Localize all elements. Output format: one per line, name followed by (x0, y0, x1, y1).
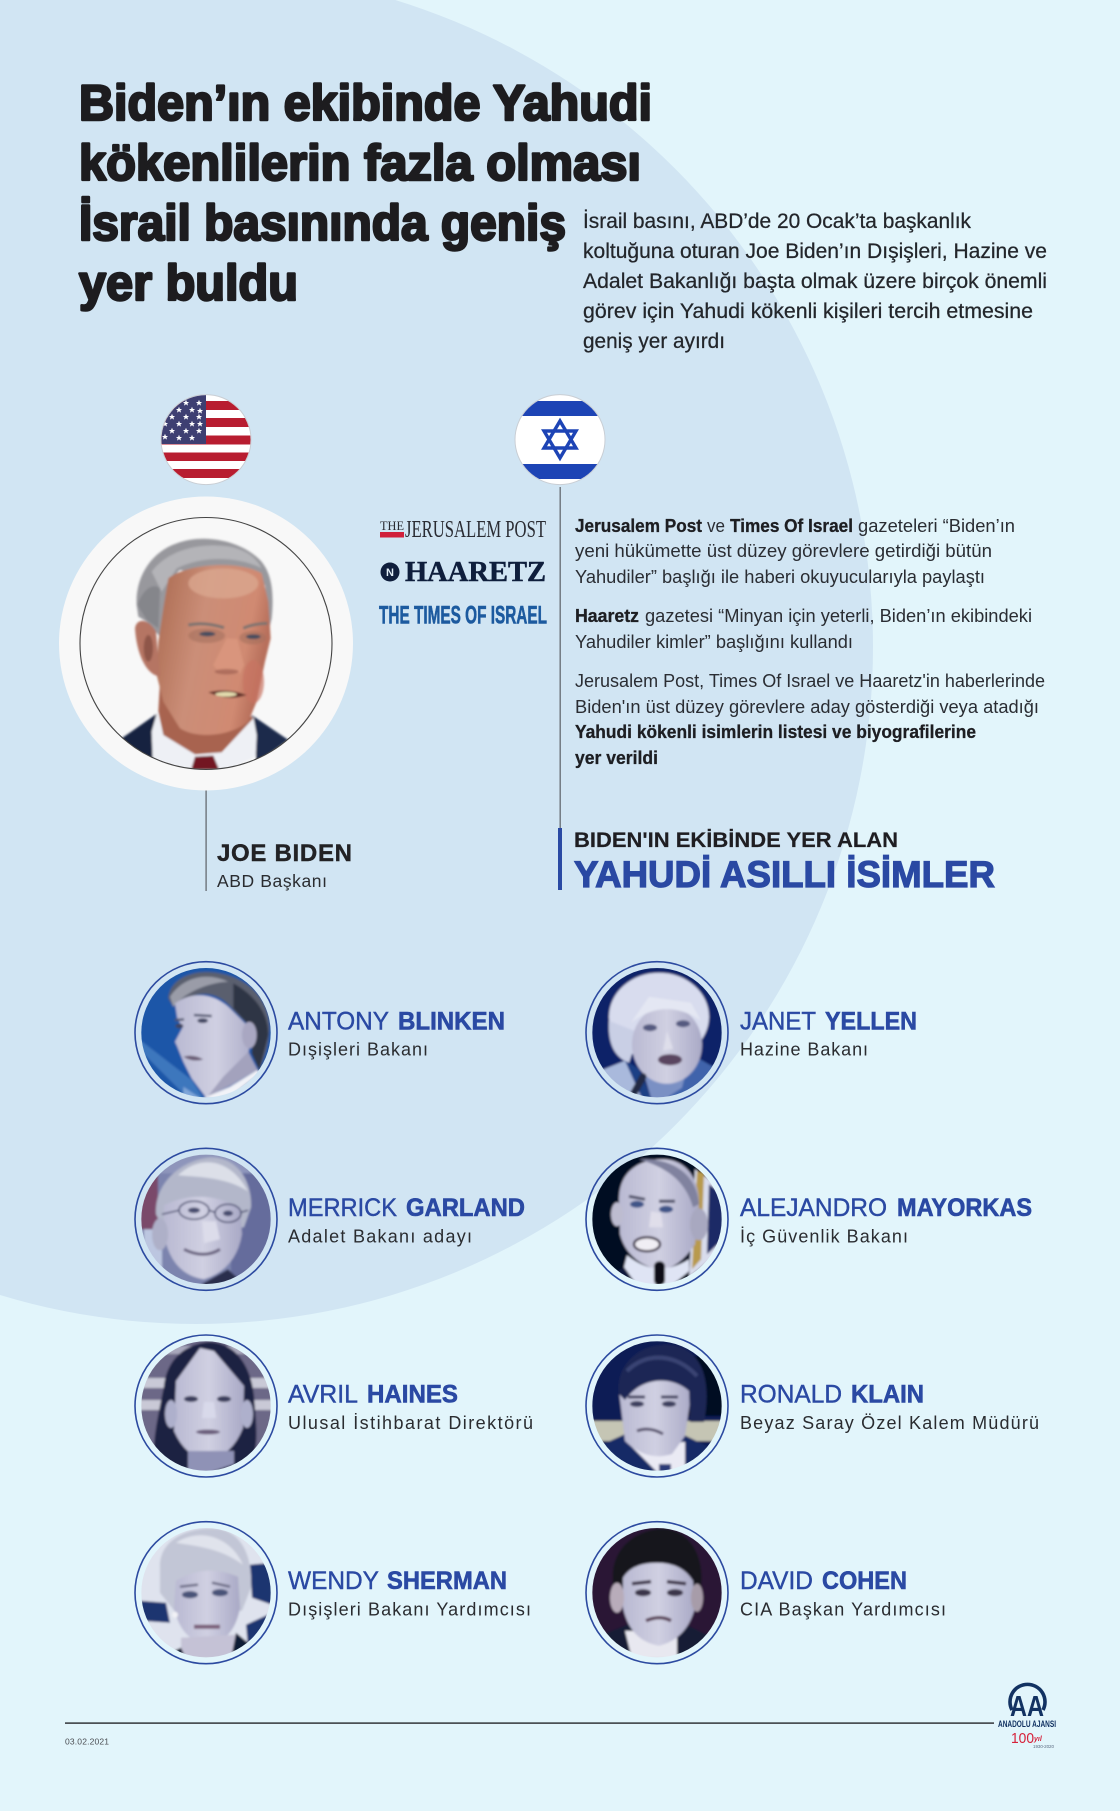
news text: Times Of Israel (730, 515, 853, 536)
person: Alejandro Mayorkas: İç Güvenlik Bakanı (740, 1226, 908, 1246)
intro text: koltuğuna oturan Joe Biden’ın Dışişleri, Hazine ve (583, 240, 1047, 263)
person: Janet Yellen (586, 962, 917, 1104)
logo: Anadolu Ajansı: 1930-2020 (1033, 1744, 1054, 1749)
person: Merrick Garland: Adalet Bakanı adayı (288, 1226, 472, 1246)
person: Ronald Klain (586, 1335, 1039, 1477)
person: Ronald Klain: Beyaz Saray Özel Kalem Müdürü (740, 1413, 1039, 1433)
person: Antony Blinken: BLINKEN (398, 1008, 505, 1036)
logo: The Times of Israel: THE TIMES OF ISRAEL (379, 602, 547, 630)
logo: Haaretz: N (386, 567, 394, 579)
icon: Israel flag (514, 395, 606, 485)
icon: US flag (160, 394, 252, 485)
news text (575, 515, 1045, 768)
news text: Jerusalem Post (575, 515, 702, 536)
news text: Haaretz (575, 605, 639, 626)
person: Avril Haines (135, 1335, 533, 1477)
person: Alejandro Mayorkas: ALEJANDRO (740, 1194, 887, 1222)
logo: Anadolu Ajansı (998, 1684, 1056, 1749)
logo: The Jerusalem Post (380, 517, 546, 543)
person: Alejandro Mayorkas (586, 1148, 1032, 1290)
person: Avril Haines: HAINES (367, 1381, 458, 1409)
news text: yeni hükümette üst düzey görevlere getirdiği bütün (575, 540, 992, 561)
person: Antony Blinken: ANTONY (288, 1008, 389, 1036)
person: Antony Blinken (135, 962, 505, 1104)
date: 03.02.2021 (65, 1736, 109, 1746)
person: Wendy Sherman (135, 1522, 531, 1664)
person: David Cohen: DAVID (740, 1567, 813, 1595)
logo: The Jerusalem Post: THE (380, 518, 404, 533)
logo: The Jerusalem Post: JERUSALEM POST (405, 517, 546, 543)
label: Joe Biden: JOE BIDEN (217, 840, 352, 867)
portrait: Joe Biden (59, 496, 353, 790)
connector line: Biden (205, 790, 207, 891)
logo: Anadolu Ajansı: AA (1010, 1691, 1044, 1723)
news text: gazetesi “Minyan için yeterli, Biden’ın ekibindeki (645, 605, 1032, 626)
news text: Jerusalem Post, Times Of Israel ve Haaretz'in haberlerinde (575, 670, 1045, 691)
person: Wendy Sherman: WENDY (288, 1567, 379, 1595)
news text: Biden'ın üst düzey görevlere aday gösterdiği veya atadığı (575, 696, 1039, 717)
large background circle (0, 0, 873, 1324)
person: David Cohen (586, 1522, 946, 1664)
connector line: Israel (560, 487, 561, 829)
person: Janet Yellen: Hazine Bakanı (740, 1040, 868, 1060)
title: Biden’ın ekibinde Yahudi (79, 75, 652, 131)
news text: Yahudiler” başlığı ile haberi okuyucularıyla paylaştı (575, 566, 985, 587)
person: Janet Yellen: JANET (740, 1008, 816, 1036)
person: Alejandro Mayorkas: MAYORKAS (897, 1194, 1032, 1222)
person: Antony Blinken: Dışişleri Bakanı (288, 1040, 428, 1060)
news text: gazeteleri “Biden’ın (858, 515, 1015, 536)
person: David Cohen: CIA Başkan Yardımcısı (740, 1600, 946, 1620)
person: Merrick Garland: MERRICK (288, 1194, 397, 1222)
person: Ronald Klain: RONALD (740, 1381, 842, 1409)
section heading: BIDEN'IN EKİBİNDE YER ALAN (574, 829, 898, 852)
logo: Anadolu Ajansı: 100 (1011, 1730, 1034, 1747)
intro text (583, 210, 1047, 353)
person: David Cohen: COHEN (822, 1567, 907, 1595)
person: Merrick Garland (135, 1148, 525, 1290)
logo: Anadolu Ajansı: yıl (1033, 1736, 1043, 1743)
intro text: geniş yer ayırdı (583, 330, 725, 353)
news text: Yahudiler kimler” başlığını kullandı (575, 631, 853, 652)
intro text: İsrail basını, ABD’de 20 Ocak’ta başkanlık (583, 210, 971, 233)
section heading (558, 828, 995, 895)
footer rule (65, 1722, 994, 1724)
person: Janet Yellen: YELLEN (825, 1008, 917, 1036)
title: kökenlilerin fazla olması (79, 135, 641, 191)
label: Joe Biden (217, 840, 352, 891)
news text: yer verildi (575, 747, 658, 768)
title: İsrail basınında geniş (79, 195, 566, 251)
intro text: görev için Yahudi kökenli kişileri tercih etmesine (583, 300, 1033, 323)
person: Merrick Garland: GARLAND (406, 1194, 525, 1222)
person: Ronald Klain: KLAIN (851, 1381, 924, 1409)
person: Wendy Sherman: Dışişleri Bakanı Yardımcısı (288, 1600, 531, 1620)
logo: Haaretz: HAARETZ (405, 557, 546, 588)
title: yer buldu (79, 255, 298, 311)
person: Wendy Sherman: SHERMAN (387, 1567, 507, 1595)
news text: ve (707, 515, 725, 536)
label: Joe Biden: ABD Başkanı (217, 871, 327, 891)
title (79, 75, 652, 311)
person: Avril Haines: AVRIL (288, 1381, 358, 1409)
person: Avril Haines: Ulusal İstihbarat Direktörü (288, 1413, 533, 1433)
section heading: YAHUDİ ASILLI İSİMLER (574, 854, 995, 895)
intro text: Adalet Bakanlığı başta olmak üzere birçok önemli (583, 270, 1047, 293)
logo: Anadolu Ajansı: ANADOLU AJANSI (998, 1719, 1056, 1730)
news text: Yahudi kökenli isimlerin listesi ve biyografilerine (575, 721, 976, 742)
